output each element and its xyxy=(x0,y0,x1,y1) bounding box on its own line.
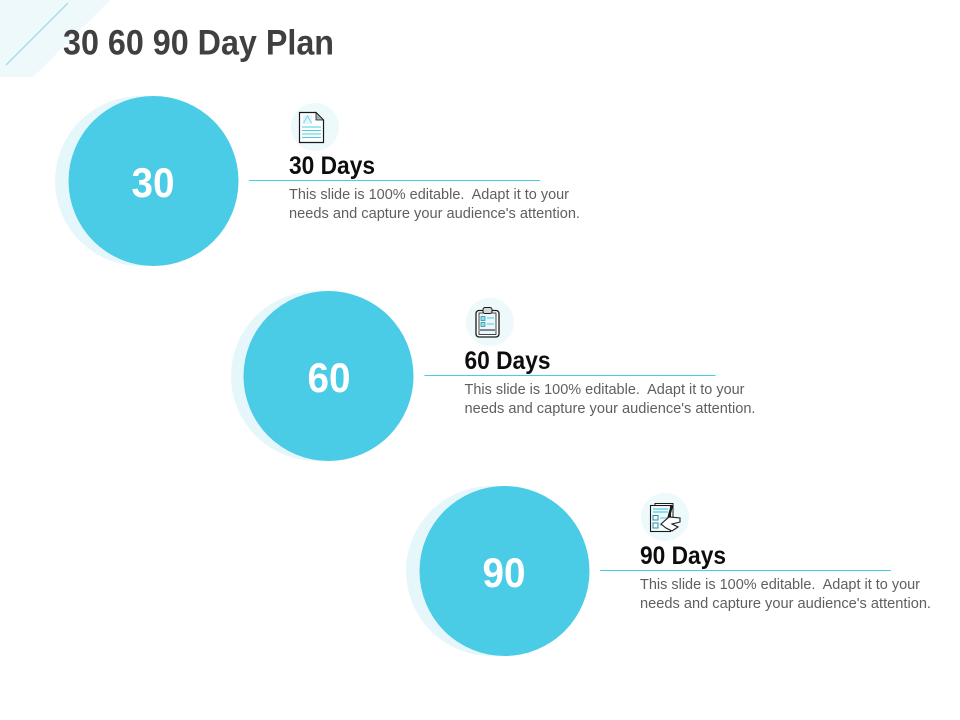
icon: document xyxy=(291,103,339,151)
divider line xyxy=(249,180,540,182)
decorative corner accent xyxy=(0,0,110,77)
circle: 90 xyxy=(406,486,590,656)
heading: 60 Days: 60 Days xyxy=(464,347,550,375)
icon: clipboard checklist xyxy=(466,298,514,346)
heading: 90 Days: 90 Days xyxy=(640,542,726,570)
circle: 30 xyxy=(55,96,238,266)
divider line xyxy=(424,374,716,376)
description: needs and capture your audience's attention. xyxy=(464,401,756,417)
heading: 30 Days: 30 Days xyxy=(289,152,375,180)
description: This slide is 100% editable. Adapt it to your xyxy=(289,187,569,203)
panel: 30 days xyxy=(55,96,580,266)
panel: 60 days xyxy=(231,291,756,461)
description xyxy=(289,187,580,222)
circle: 30: 30 xyxy=(132,159,174,206)
circle: 60: 60 xyxy=(308,354,350,401)
description xyxy=(640,577,931,612)
title: 30 60 90 Day Plan xyxy=(63,24,334,62)
description xyxy=(464,382,756,417)
description: needs and capture your audience's attention. xyxy=(640,596,931,612)
circle: 60 xyxy=(231,291,414,461)
description: This slide is 100% editable. Adapt it to your xyxy=(464,382,745,398)
description: This slide is 100% editable. Adapt it to your xyxy=(640,577,920,593)
icon: signing checklist xyxy=(641,493,689,541)
panel: 90 days xyxy=(406,486,931,656)
divider line xyxy=(600,570,891,572)
circle: 90: 90 xyxy=(482,549,526,596)
description: needs and capture your audience's attention. xyxy=(289,206,580,222)
